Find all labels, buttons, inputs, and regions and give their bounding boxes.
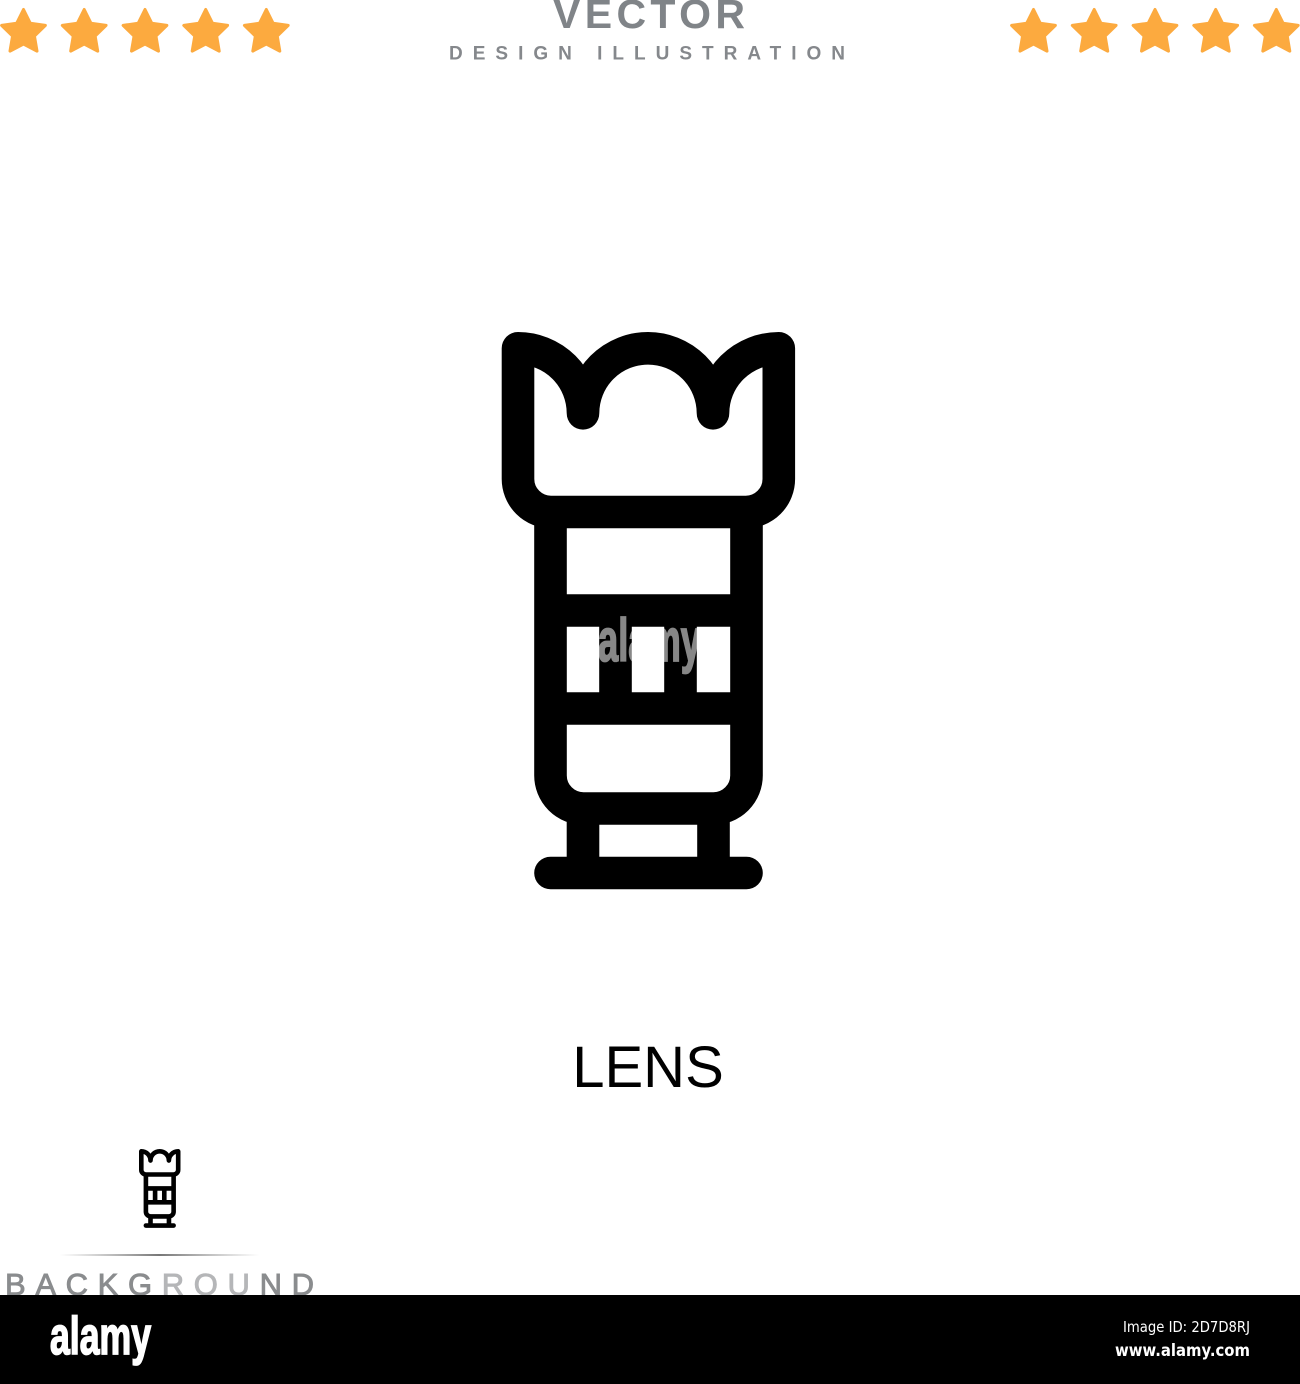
star 4 — [184, 10, 228, 51]
logo: alamy: alamy — [50, 1307, 151, 1366]
star 2 — [1072, 10, 1116, 51]
star 5 — [1254, 10, 1298, 51]
star 2 — [62, 10, 106, 51]
star 4 — [1194, 10, 1238, 51]
icon: camera lens (large) — [518, 348, 779, 873]
website url: www.alamy.com — [1115, 1341, 1250, 1360]
right star rating — [1012, 10, 1298, 51]
subheading: DESIGN ILLUSTRATION: DESIGN ILLUSTRATION — [449, 44, 845, 64]
label: BACKGROUND: BACKG ROU ND — [5, 1267, 314, 1302]
image id: Image ID: 2D7D8RJ — [1123, 1318, 1250, 1336]
footer bar — [0, 1295, 1300, 1384]
icon: camera lens (small) — [141, 1151, 178, 1226]
divider line — [60, 1254, 259, 1256]
left star rating — [2, 10, 288, 51]
star 1 — [1012, 10, 1055, 51]
star 3 — [1133, 10, 1177, 51]
watermark: alamy: alamy — [598, 607, 701, 674]
star 5 — [244, 10, 288, 51]
star 3 — [123, 10, 167, 51]
title: LENS: LENS — [572, 1035, 724, 1100]
star 1 — [2, 10, 45, 51]
